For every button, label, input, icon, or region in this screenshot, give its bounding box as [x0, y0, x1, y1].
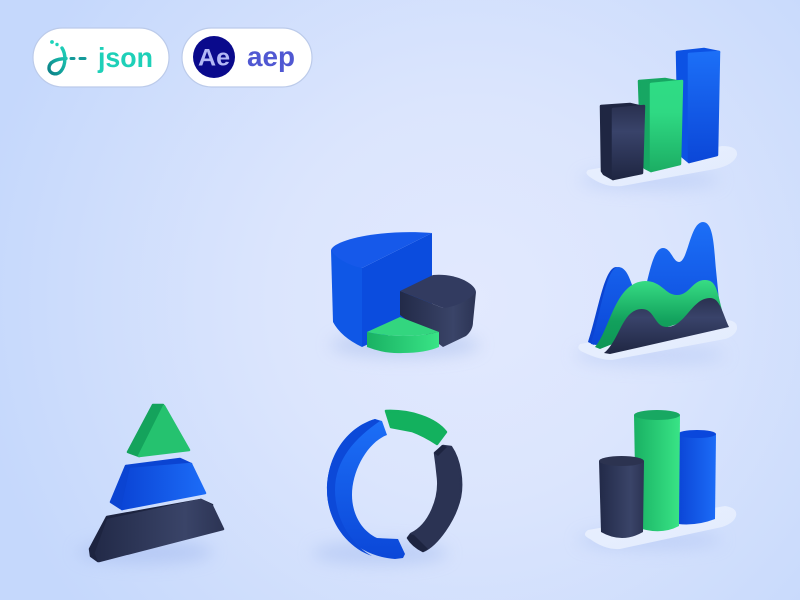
chart: 3D area chart [575, 222, 737, 366]
blue arc [327, 419, 405, 559]
chart: 3D donut [312, 411, 461, 565]
blue bar [677, 49, 719, 162]
green bar [639, 79, 682, 171]
badge: json [33, 28, 169, 87]
blue area [588, 222, 719, 345]
chart: 3D bar chart [580, 49, 737, 190]
chart: 3D cylinders [578, 410, 736, 550]
navy area [604, 298, 729, 354]
green cylinder [634, 410, 680, 531]
green slice [367, 317, 439, 353]
platform [578, 320, 737, 360]
blue cylinder [678, 430, 716, 524]
icon: json logo [49, 40, 85, 74]
navy arc [407, 445, 461, 552]
platform [586, 146, 737, 186]
shadow [312, 541, 448, 565]
navy slice [400, 275, 476, 347]
badge: aep [182, 28, 312, 87]
chart: 3D pyramid [77, 405, 223, 564]
navy tier [90, 500, 223, 561]
shadow [330, 332, 480, 358]
icon: After Effects logo: Ae [198, 44, 230, 72]
label: json: json [97, 42, 153, 73]
shadow [77, 540, 213, 564]
blue tier [111, 459, 205, 509]
shadow [580, 170, 720, 190]
green arc [386, 411, 446, 444]
green area [595, 280, 722, 349]
blue slice [331, 232, 432, 347]
navy bar [601, 104, 644, 179]
shadow [575, 344, 725, 366]
shadow [578, 530, 722, 550]
platform [585, 506, 736, 549]
label: aep: aep [247, 41, 295, 72]
green tier [128, 405, 189, 456]
chart: 3D pie chart [330, 232, 480, 358]
navy cylinder [599, 456, 644, 538]
